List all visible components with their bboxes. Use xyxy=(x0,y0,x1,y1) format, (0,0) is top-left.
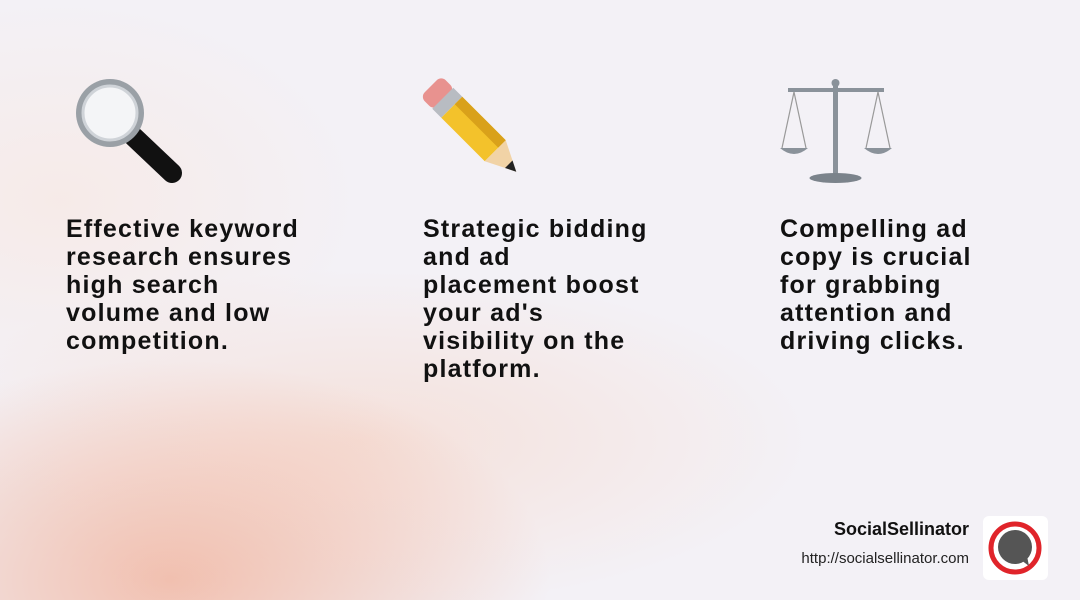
text: keyword research: Effective keyword xyxy=(66,215,299,243)
text: ad copy: Compelling ad xyxy=(780,215,968,243)
logo xyxy=(983,516,1048,580)
text: bidding: your ad's xyxy=(423,299,544,327)
text: keyword research: research ensures xyxy=(66,243,292,271)
brand url: http://socialsellinator.com xyxy=(801,550,969,567)
text: bidding: Strategic bidding xyxy=(423,215,648,243)
text: ad copy xyxy=(780,215,972,355)
text: keyword research: competition. xyxy=(66,327,229,355)
text: bidding xyxy=(423,215,648,383)
brand name: SocialSellinator xyxy=(834,519,969,539)
text: bidding: placement boost xyxy=(423,271,640,299)
icon: magnifying glass xyxy=(76,79,182,183)
text: ad copy: for grabbing xyxy=(780,271,942,299)
text: keyword research: volume and low xyxy=(66,299,270,327)
text: ad copy: copy is crucial xyxy=(780,243,972,271)
text: bidding: platform. xyxy=(423,355,541,383)
text: ad copy: driving clicks. xyxy=(780,327,965,355)
text: keyword research xyxy=(66,215,299,355)
icon: pencil xyxy=(422,78,516,172)
text: keyword research: high search xyxy=(66,271,220,299)
text: bidding: and ad xyxy=(423,243,511,271)
text: bidding: visibility on the xyxy=(423,327,625,355)
text: ad copy: attention and xyxy=(780,299,953,327)
icon: balance scale xyxy=(780,79,892,183)
